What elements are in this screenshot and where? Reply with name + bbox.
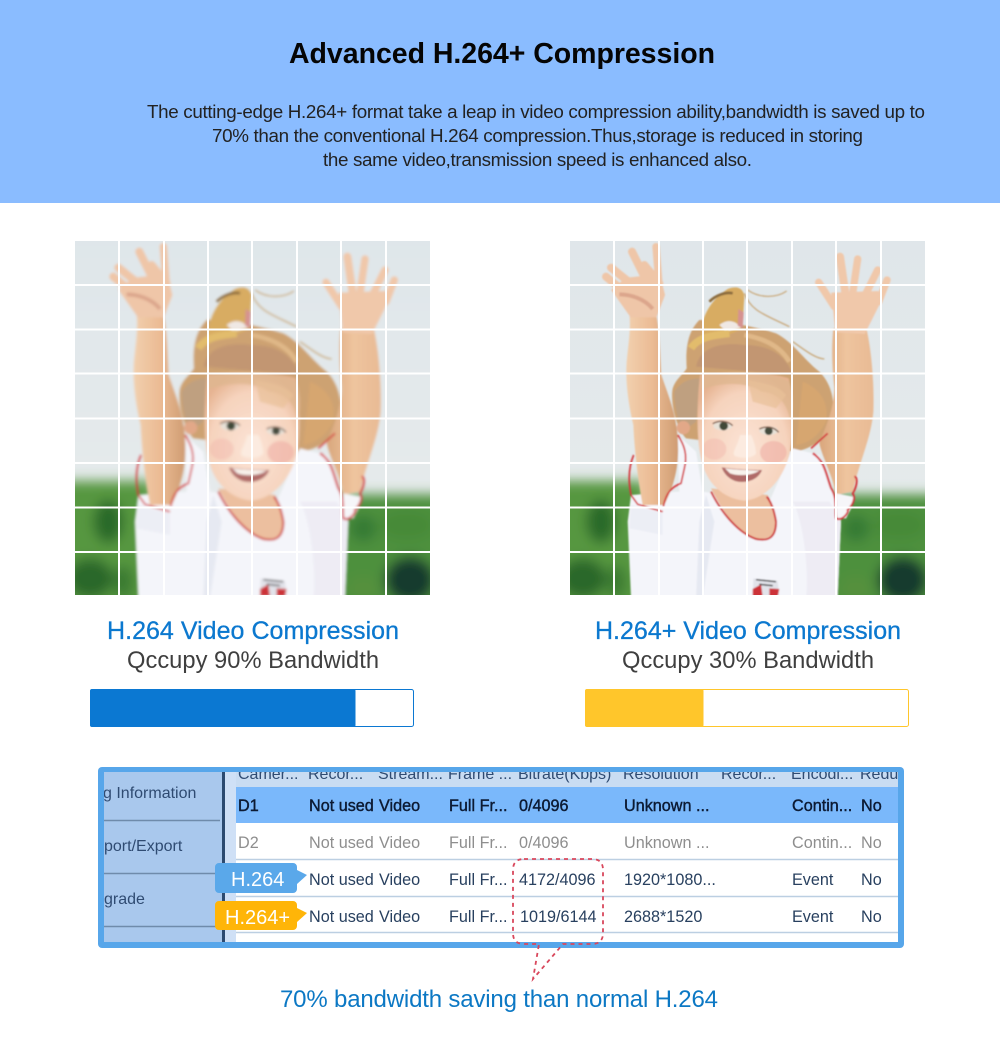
table row: D2: Contin... [792, 834, 852, 852]
table row: D2: Unknown ... [624, 834, 709, 852]
table row: H.264+: 1019/6144 [520, 908, 597, 926]
table row: D1 selected [236, 787, 898, 823]
table row: D1 selected: Contin... [792, 797, 852, 815]
table header: Encodi... [791, 766, 853, 783]
photo: H.264 [75, 241, 430, 595]
tag: H.264+ [215, 901, 307, 930]
table row: H.264+: Event [792, 908, 834, 926]
subheading: H.264 bandwidth: Qccupy 90% Bandwidth [127, 648, 379, 674]
heading: H.264: H.264 Video Compression [107, 617, 399, 645]
table row: D2: D2 [238, 834, 259, 852]
table row: H.264+: Video [379, 908, 420, 926]
header band [0, 0, 1000, 203]
table header: Recor... [308, 766, 363, 783]
intro text: 70% than the conventional H.264 compression.Thus,storage is reduced in storing [212, 125, 863, 146]
tag: H.264: H.264 [231, 869, 284, 891]
table row: D1 selected: Video [379, 797, 420, 815]
table row: H.264: Full Fr... [449, 871, 507, 889]
table header: Bitrate(Kbps) [518, 766, 611, 783]
table row: D1 selected: D1 [238, 797, 259, 815]
table header: Redu [860, 766, 898, 783]
table row: H.264: Event [792, 871, 834, 889]
subheading: H.264+ bandwidth: Qccupy 30% Bandwidth [622, 648, 874, 674]
table row: H.264: 4172/4096 [519, 871, 596, 889]
table row: H.264+ [310, 910, 882, 922]
table row: H.264+: No [861, 908, 882, 926]
heading: H.264+: H.264+ Video Compression [595, 617, 901, 645]
table row: H.264: No [861, 871, 882, 889]
table header: Resolution [623, 766, 699, 783]
sidebar: port/Export [104, 838, 183, 855]
sidebar: g Information [103, 785, 196, 802]
screenshot panel [98, 766, 904, 948]
table row: D2 [239, 836, 882, 848]
intro text [147, 101, 925, 170]
progress bar: 90% [90, 689, 414, 727]
table row: D2: 0/4096 [519, 834, 569, 852]
intro text: the same video,transmission speed is enhanced also. [323, 149, 752, 170]
table row: D1 selected: 0/4096 [519, 797, 569, 815]
table row: H.264 [310, 873, 882, 885]
sidebar: grade [104, 891, 145, 908]
table row: D2: Video [379, 834, 420, 852]
table row: D1 selected: Unknown ... [624, 797, 709, 815]
caption: 70% bandwidth saving than normal H.264 [280, 986, 718, 1013]
table row: H.264+: Full Fr... [449, 908, 507, 926]
table header: Stream... [378, 766, 443, 783]
table row: D2: Not used [309, 834, 374, 852]
tag: H.264+: H.264+ [225, 907, 290, 929]
progress bar: 30% [585, 689, 908, 727]
table row: D2: Full Fr... [449, 834, 507, 852]
title: Advanced H.264+ Compression [289, 38, 715, 70]
table row: H.264+: Not used [309, 908, 374, 926]
table row: D1 selected: Full Fr... [449, 797, 507, 815]
table row: D1 selected: No [861, 797, 882, 815]
table row: H.264+: 2688*1520 [624, 908, 702, 926]
dashed highlight and pointer [513, 859, 603, 979]
sidebar [103, 772, 236, 942]
table row: D2: No [861, 834, 882, 852]
table row: D1 selected: Not used [309, 797, 374, 815]
photo: H.264+ [570, 241, 925, 595]
tag: H.264 [215, 863, 307, 893]
table header: Camer... [238, 766, 298, 783]
table row: H.264: Not used [309, 871, 374, 889]
table header: Frame ... [448, 766, 512, 783]
table header [236, 772, 898, 787]
table header: Recor... [721, 766, 776, 783]
table row: H.264: Video [379, 871, 420, 889]
table row: H.264: 1920*1080... [624, 871, 716, 889]
intro text: The cutting-edge H.264+ format take a leap in video compression ability,bandwidth is saved up to [147, 101, 925, 122]
